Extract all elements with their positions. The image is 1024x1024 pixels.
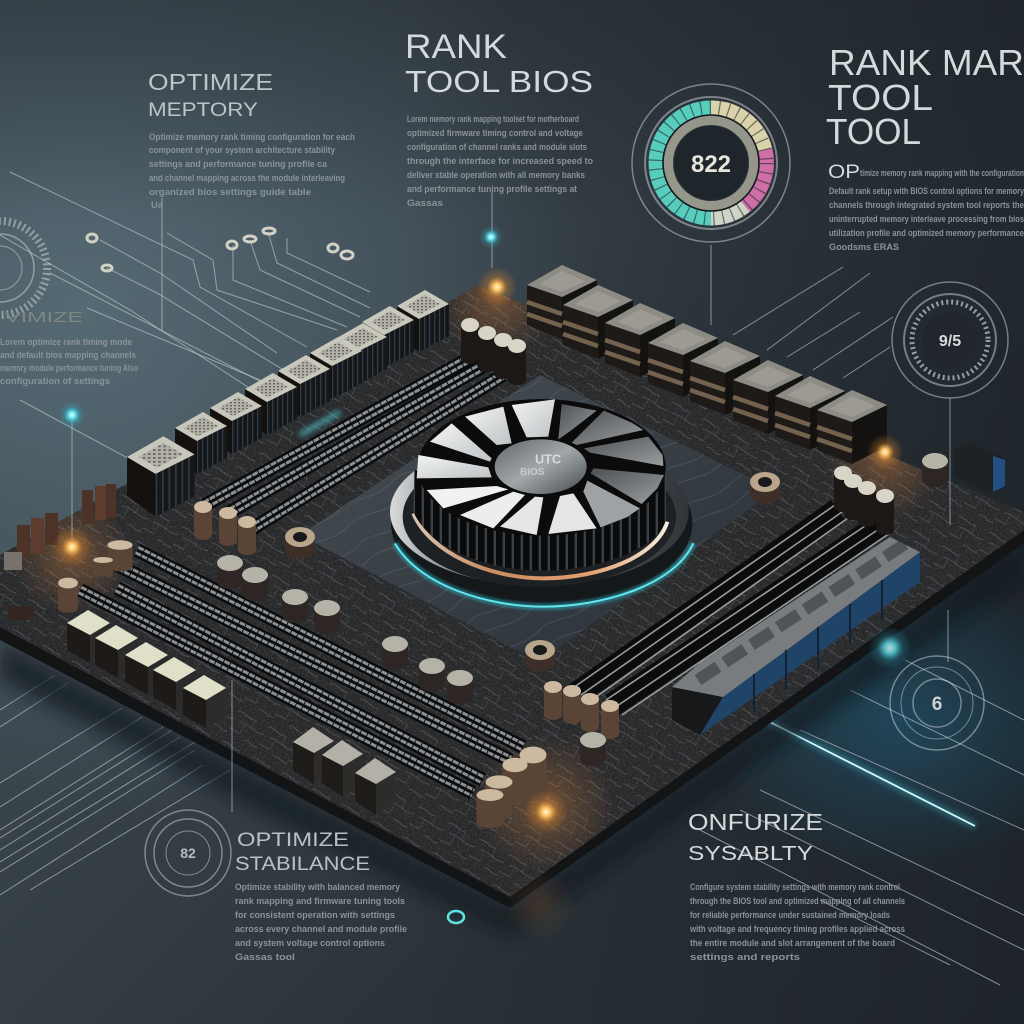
body text: for reliable performance under sustained memory loads — [690, 910, 890, 920]
right side components — [922, 443, 1005, 494]
heading: VIMIZE — [5, 309, 83, 326]
block: rank tool bios — [405, 28, 593, 208]
motherboard — [0, 285, 1024, 908]
hub label: UTC — [535, 452, 561, 466]
circuit traces: right upper — [733, 267, 893, 378]
gauge: 6: 6 — [932, 694, 942, 715]
heading: RANK MAR — [829, 42, 1024, 83]
base ring — [391, 441, 692, 606]
block: optimize stability — [688, 809, 905, 962]
memory slots: bottom left — [58, 540, 546, 828]
body text: component of your system architecture stability — [149, 145, 335, 155]
body text: settings and reports — [690, 952, 800, 962]
body text: and system voltage control options — [235, 938, 385, 948]
metal rim — [390, 438, 689, 586]
fan heatsink — [390, 399, 693, 607]
gauge: 6 — [890, 656, 984, 750]
central plate — [300, 375, 775, 662]
body text: through the BIOS tool and optimized mapping of all channels — [690, 896, 905, 906]
body text: across every channel and module profile — [235, 924, 407, 934]
block: optimize memory — [148, 69, 355, 210]
fan blades — [417, 399, 664, 535]
body text: optimized firmware timing control and voltage — [407, 128, 583, 138]
heading — [688, 809, 823, 865]
body text — [149, 132, 355, 210]
heading: ONFURIZE — [688, 809, 823, 835]
body text: configuration of channel ranks and module slots — [407, 142, 587, 152]
body text: rank mapping and firmware tuning tools — [235, 896, 405, 906]
body text: memory module performance tuning Also — [0, 363, 138, 373]
circuit traces: lower right — [700, 660, 1024, 985]
gauge: lower left — [145, 810, 231, 896]
heading: MEPTORY — [148, 100, 258, 121]
block: left optimize — [0, 309, 138, 386]
heading: STABILANCE — [235, 854, 370, 875]
gauge: 975 — [892, 282, 1008, 398]
body text: Gassas tool — [235, 952, 295, 962]
body text: organized bios settings guide table — [149, 187, 311, 197]
body text — [689, 882, 905, 962]
body text: Optimize memory rank timing configuration for each — [149, 132, 355, 142]
gauge: 975: 9/5 — [939, 333, 961, 350]
body text: Lorem optimize rank timing mode — [0, 337, 132, 347]
heading: TOOL — [826, 111, 921, 152]
body text: and channel mapping across the module interleaving — [149, 173, 345, 183]
gauge: 822 — [632, 84, 790, 242]
body text: Configure system stability settings with memory rank control — [690, 882, 900, 892]
top right chip row — [527, 265, 887, 464]
body text — [0, 337, 138, 386]
heading — [235, 830, 370, 875]
heading: TOOL — [828, 77, 933, 118]
bottom left chip row — [67, 610, 226, 728]
body text: with voltage and frequency timing profiles applied across — [689, 924, 905, 934]
board shadow — [0, 545, 1024, 935]
heading: RANK — [405, 28, 507, 66]
body text: the entire module and slot arrangement of the board — [690, 938, 895, 948]
body text: Optimize stability with balanced memory — [235, 882, 400, 892]
block: rank map tool — [826, 42, 1024, 252]
heading: TOOL BIOS — [405, 64, 593, 99]
top left chip row — [127, 290, 449, 517]
heading: OPTIMIZE — [148, 69, 273, 95]
circuit traces: upper left — [0, 172, 370, 470]
body text: settings and performance tuning profile ca — [149, 159, 328, 169]
plate texture — [300, 375, 775, 662]
circuit traces: lower left — [0, 675, 230, 895]
heading: OPTIMIZE — [237, 830, 349, 851]
memory slots: bottom right — [544, 466, 894, 739]
hub label: BIOS — [520, 467, 545, 478]
hub — [495, 439, 587, 494]
body text: for consistent operation with settings — [235, 910, 395, 920]
body text: deliver stable operation with all memory banks — [407, 170, 585, 180]
lower chip row — [293, 727, 396, 815]
body text — [235, 882, 407, 962]
bottom right chip row — [672, 537, 920, 735]
heading — [826, 42, 1024, 183]
body text — [407, 114, 593, 208]
hub label — [520, 452, 561, 478]
body text: and default bios mapping channels — [0, 350, 136, 360]
capacitors — [217, 555, 606, 766]
ribbed body — [413, 470, 666, 571]
body text: Goodsms ERAS — [829, 242, 899, 252]
gauge value: 822 — [691, 151, 731, 178]
body text: Gassas — [407, 198, 443, 208]
body text: and performance tuning profile settings at — [407, 184, 577, 194]
heading: SYSABLTY — [688, 843, 813, 865]
cyan glow arc — [395, 543, 693, 607]
body text: configuration of settings — [0, 376, 110, 386]
heading: OP — [828, 162, 860, 183]
glowing nodes and connector lines — [52, 192, 950, 940]
body text: Lorem memory rank mapping toolset for motherboard — [407, 114, 579, 124]
body text: Ua — [151, 200, 164, 210]
copper ring — [413, 513, 667, 578]
plate mounting holes — [285, 472, 780, 672]
trace end pads — [87, 228, 353, 271]
memory slots: top left — [194, 318, 526, 555]
body text: through the interface for increased speed to — [407, 156, 593, 166]
top disc — [418, 399, 666, 536]
heading — [405, 28, 593, 99]
left side components — [4, 484, 116, 620]
gauge: left partial — [0, 221, 47, 315]
heading — [148, 69, 273, 121]
gauge: lower left: 82 — [180, 845, 196, 861]
body text — [829, 168, 1024, 252]
block: optimize stabilance — [235, 830, 407, 962]
